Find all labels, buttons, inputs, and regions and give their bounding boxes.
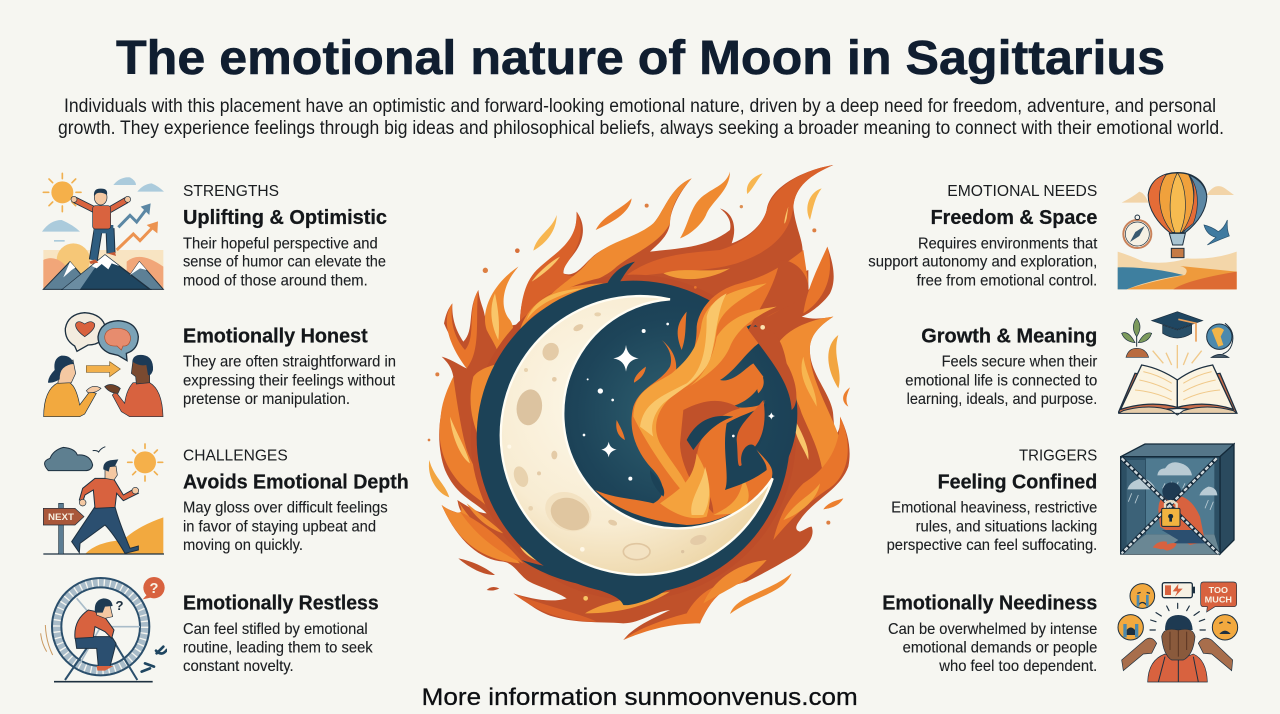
panel: challenges, avoids emotional depth text: moving on quickly. [183,537,303,554]
crescent moon [501,296,773,575]
icon: person stuck in a hamster wheel: ? [115,598,123,613]
flame over upper right of moon disk [595,250,809,525]
icon: person locked in a chained box [1120,442,1235,556]
panel: challenges, avoids emotional depth text: Avoids Emotional Depth [183,470,409,493]
central illustration: moon in flames [428,165,850,640]
panel: triggers, feeling confined text [887,448,1097,554]
icon: hot air balloon, compass and landscape [1118,172,1237,290]
icon: book, plant, graduation cap and globe [1118,311,1238,416]
icon: person walking past a next sign [43,443,164,555]
title: The emotional nature of Moon in Sagittarius [116,32,1165,85]
chains [1122,458,1218,553]
panel: challenges, avoids emotional depth text: May gloss over difficult feelings [183,500,388,517]
panel: strengths, uplifting and optimistic text: STRENGTHS [183,183,279,200]
icon: question bubble: ? [150,581,159,597]
panel: strengths, uplifting and optimistic text: Uplifting & Optimistic [183,206,387,229]
stars [583,323,775,481]
panel: emotionally restless text: Can feel stifled by emotional [183,621,368,638]
panel: emotionally honest text: Emotionally Honest [183,324,368,347]
panel: emotional needs, freedom and space text [868,183,1098,289]
panel: triggers, feeling confined text: Feeling Confined [938,470,1097,493]
panel: emotionally honest text: expressing their feelings without [183,372,396,389]
panel: emotionally neediness text [882,591,1097,675]
outer flame silhouette [439,165,850,640]
panel: growth and meaning text [905,324,1098,408]
panel: strengths, uplifting and optimistic text [183,183,387,289]
padlock [1162,501,1180,526]
dark sky disk [477,262,797,605]
speech bubble: too much [1201,582,1237,612]
panel: challenges, avoids emotional depth text [183,448,409,554]
panel: emotionally restless text: Emotionally Restless [183,591,379,614]
panel: emotional needs, freedom and space text: Freedom & Space [931,206,1097,229]
panel: emotionally restless text: constant novelty. [183,658,294,675]
speech bubble: too much: TOO [1209,585,1228,595]
panel: strengths, uplifting and optimistic text: Their hopeful perspective and [183,235,378,252]
panel: challenges, avoids emotional depth text: CHALLENGES [183,448,288,465]
panel: emotionally honest text: They are often straightforward in [183,354,396,371]
icon: overwhelmed person surrounded by crying faces [1118,582,1238,682]
panel: challenges, avoids emotional depth text: in favor of staying upbeat and [183,518,376,535]
panel: emotionally restless text [183,591,379,675]
panel: emotionally honest text: pretense or manipulation. [183,391,350,408]
balloon [1148,173,1207,258]
panel: growth and meaning text: Growth & Meaning [921,324,1097,347]
panel: strengths, uplifting and optimistic text: sense of humor can elevate the [183,254,386,271]
embers and loose flame droplets [428,172,850,614]
icon: person stuck in a hamster wheel [40,577,167,682]
panel: emotionally restless text: routine, leading them to seek [183,639,373,656]
battery icon [1162,583,1195,598]
icon: two people talking with heart and brain bubbles [43,312,164,417]
icon: person on a mountain peak [42,172,164,290]
compass [1123,215,1151,248]
sign: next: NEXT [48,512,75,522]
panel: strengths, uplifting and optimistic text: mood of those around them. [183,272,368,289]
speech bubble: too much: MUCH [1205,594,1232,604]
intro text block [58,95,1224,139]
footer: More information sunmoonvenus.com [422,684,858,711]
panel: emotional needs, freedom and space text: EMOTIONAL NEEDS [947,183,1097,200]
panel: emotionally honest text [183,324,396,408]
